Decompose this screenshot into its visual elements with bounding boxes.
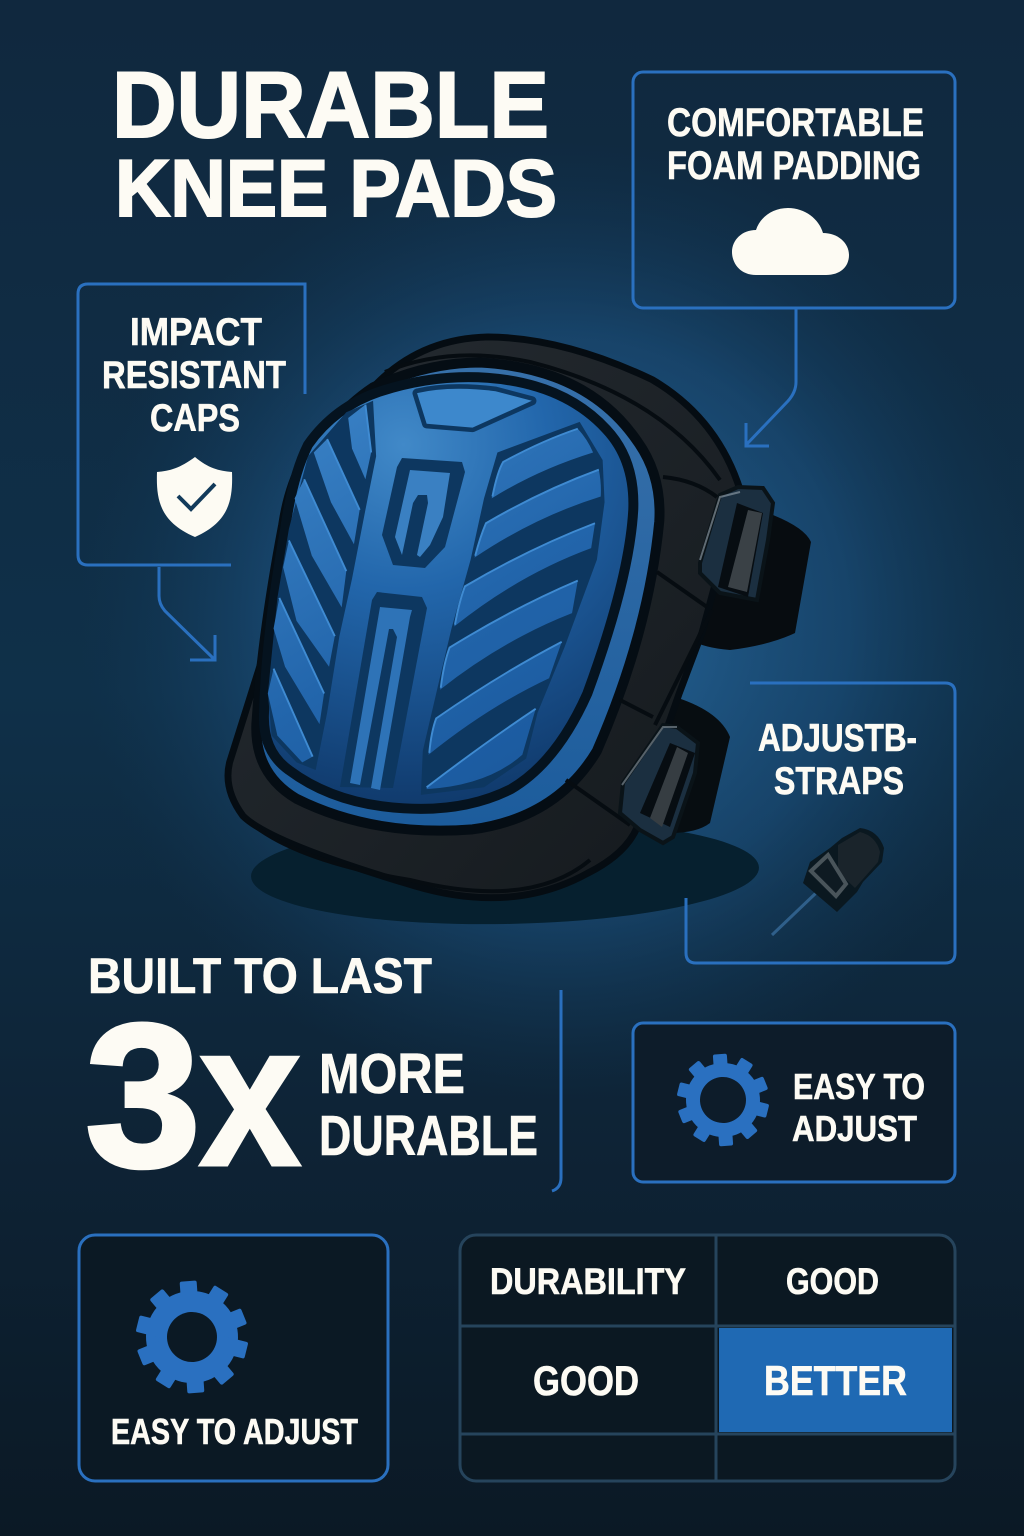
heading: built to last: BUILT TO LAST (88, 948, 432, 1004)
rear strap lower (640, 698, 730, 833)
title: DURABLE (112, 52, 549, 157)
title: KNEE PADS (115, 144, 557, 234)
panel: easy to adjust large: EASY TO ADJUST (111, 1411, 358, 1452)
comparison table: GOOD (533, 1357, 639, 1404)
lower spine panel (340, 592, 427, 790)
ground shadow (250, 816, 760, 928)
panel: easy to adjust small (633, 1023, 955, 1182)
pad body (228, 337, 740, 898)
icon: gear (674, 1051, 772, 1149)
cap shell (264, 377, 633, 809)
cap rim (256, 363, 660, 831)
title (112, 52, 557, 234)
stat: 3x more durable: MORE (319, 1042, 465, 1106)
body seams (245, 355, 720, 891)
panel: adjustable straps (686, 683, 955, 963)
comparison table: GOOD (786, 1261, 879, 1302)
panel: impact resistant caps: RESISTANT (102, 354, 286, 397)
panel: impact resistant caps: CAPS (150, 397, 240, 440)
arrow: foam padding connector (746, 309, 796, 446)
icon: cloud (732, 208, 849, 275)
panel: impact resistant caps (78, 284, 305, 565)
panel: comfortable foam padding (633, 72, 955, 308)
icon: gear (132, 1277, 252, 1397)
comparison table (460, 1235, 955, 1481)
stat: 3x more durable: DURABLE (319, 1104, 538, 1168)
panel: easy to adjust small: ADJUST (792, 1108, 917, 1149)
stat: 3x more durable (85, 981, 538, 1210)
comparison table: DURABILITY (490, 1261, 686, 1302)
panel: comfortable foam padding: COMFORTABLE (667, 101, 924, 145)
icon: shield (157, 457, 232, 537)
panel: easy to adjust large (79, 1235, 388, 1481)
highlighted cell (719, 1328, 952, 1432)
ribs (268, 405, 601, 789)
comparison table: BETTER (764, 1357, 907, 1404)
illustration: knee pad (228, 337, 811, 928)
panel: easy to adjust small: EASY TO (793, 1066, 925, 1107)
groove backing (268, 401, 605, 795)
centre shield panel (382, 458, 465, 568)
buckle upper (700, 487, 773, 600)
panel: comfortable foam padding: FOAM PADDING (667, 144, 921, 188)
panel: impact resistant caps: IMPACT (130, 311, 262, 354)
arrow: impact caps connector (159, 567, 215, 660)
top panel (417, 389, 532, 428)
stat: 3x more durable: x (199, 981, 301, 1209)
buckle lower (620, 725, 698, 843)
stat: 3x more durable: 3 (85, 982, 201, 1210)
rear strap upper (690, 505, 811, 650)
icon: strap buckle (772, 828, 884, 935)
panel: adjustable straps: STRAPS (774, 760, 904, 803)
panel: adjustable straps: ADJUSTB- (758, 717, 917, 760)
rib highlights (274, 405, 599, 787)
